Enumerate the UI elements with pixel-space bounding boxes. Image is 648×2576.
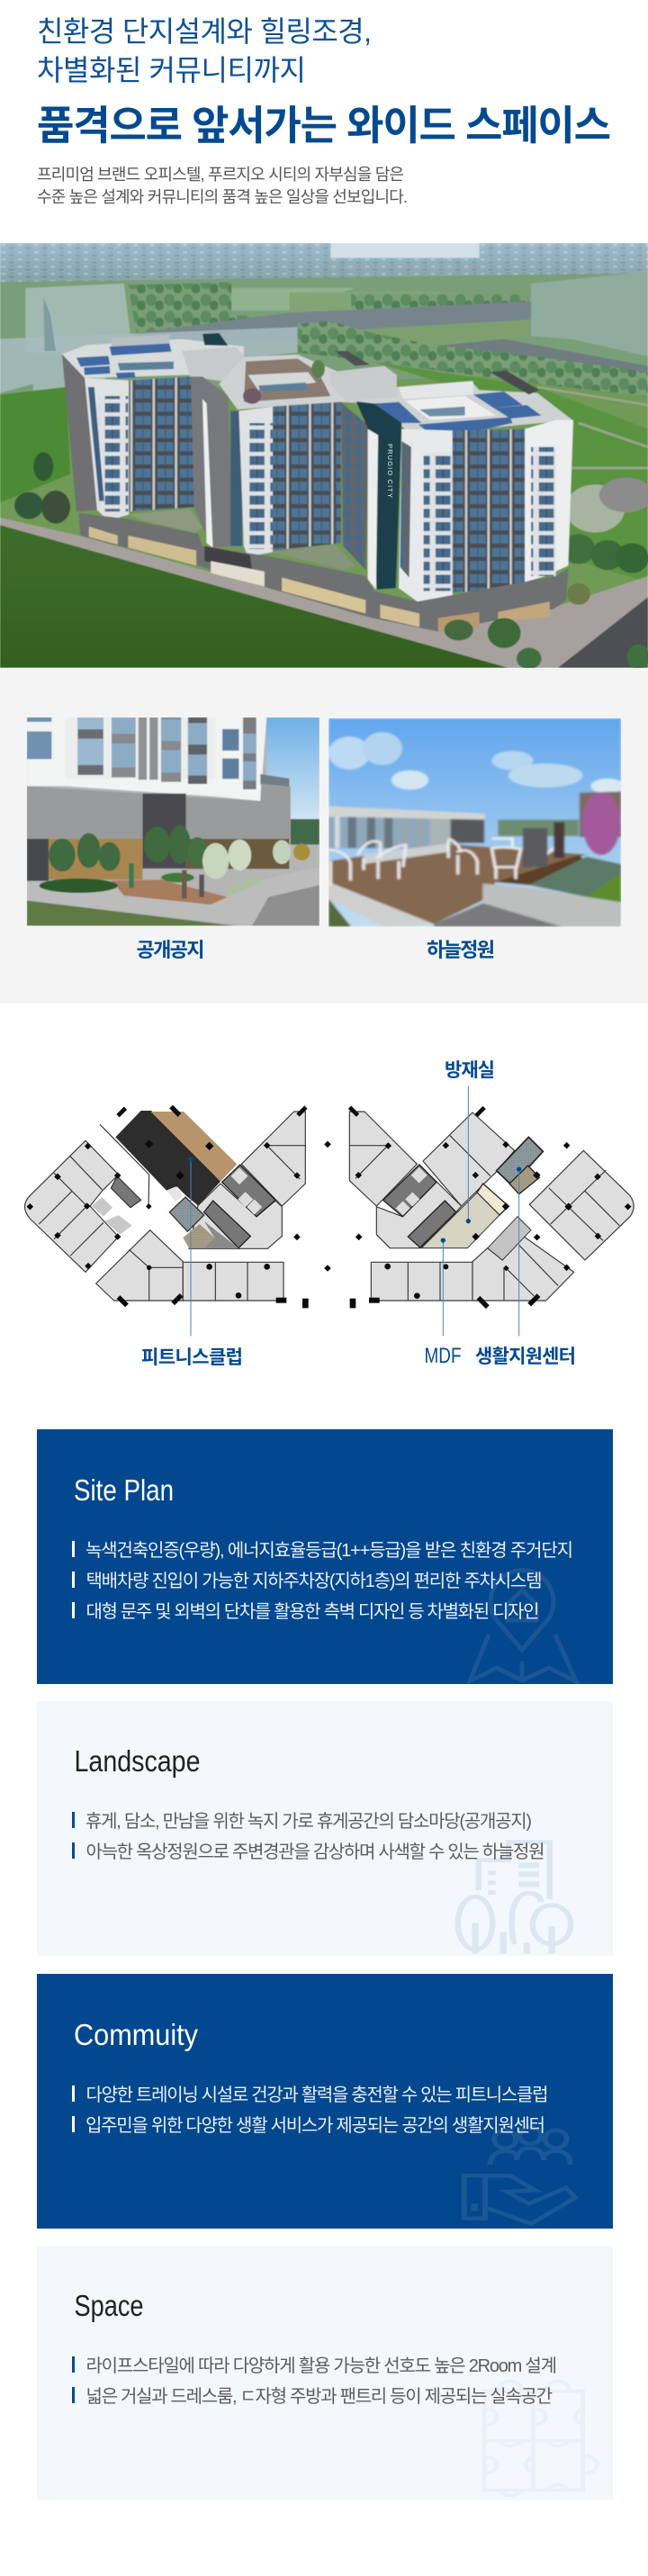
title line 1: 친환경 단지설계와 힐링조경, [37, 15, 372, 48]
panel: Landscape [37, 1701, 613, 1956]
list: Site Plan: 택배차량 진입이 가능한 지하주차장(지하1층)의 편리한 주차시스템 [86, 1571, 542, 1591]
sign text on building: PRUGIO CITY [386, 444, 394, 498]
list: Site Plan: 녹색건축인증(우량), 에너지효율등급(1++등급)을 받은 친환경 주거단지 [86, 1540, 573, 1561]
list: Space: 라이프스타일에 따라 다양하게 활용 가능한 선호도 높은 2Room 설계 [86, 2355, 557, 2376]
list: Site Plan: 대형 문주 및 외벽의 단차를 활용한 측벽 디자인 등 차별화된 디자인 [86, 1601, 540, 1622]
label: disaster control room: 방재실 [445, 1060, 495, 1081]
list: Space [72, 2355, 557, 2407]
title line 2: 차별화된 커뮤니티까지 [37, 54, 306, 86]
label: life support center: 생활지원센터 [475, 1347, 576, 1367]
icon: people in hand [464, 2127, 575, 2224]
icon: puzzle [484, 2382, 597, 2495]
heading: Landscape: Landscape [74, 1744, 200, 1778]
panel: Community [37, 1974, 613, 2229]
heading: Space: Space [74, 2289, 144, 2322]
floor plan: right wing [324, 1086, 634, 1336]
title block [37, 15, 611, 206]
list: Landscape: 휴게, 담소, 만남을 위한 녹지 가로 휴게공간의 담소마당(공개공지) [86, 1811, 532, 1832]
list: Landscape [72, 1811, 545, 1862]
label: MDF: MDF [425, 1344, 461, 1368]
heading: Site Plan: Site Plan [74, 1473, 174, 1507]
list: Landscape: 아늑한 옥상정원으로 주변경관을 감상하며 사색할 수 있는 하늘정원 [86, 1842, 545, 1862]
panel: Space [37, 2246, 613, 2500]
photo: public open space [27, 717, 320, 926]
list: Community [72, 2085, 549, 2136]
list: Site Plan [72, 1540, 573, 1622]
list: Community: 다양한 트레이닝 시설로 건강과 활력을 충전할 수 있는 피트니스클럽 [86, 2085, 549, 2105]
description line 1: 프리미엄 브랜드 오피스텔, 푸르지오 시티의 자부심을 담은 [37, 166, 404, 184]
list: Space: 넓은 거실과 드레스룸, ㄷ자형 주방과 팬트리 등이 제공되는 실속공간 [86, 2386, 553, 2407]
aerial building photo [0, 243, 648, 670]
heading: Commuity: Commuity [74, 2018, 198, 2051]
main heading: 품격으로 앞서가는 와이드 스페이스 [37, 103, 611, 149]
photo: sky garden [328, 718, 624, 927]
caption: sky garden: 하늘정원 [427, 939, 495, 961]
label: fitness club: 피트니스클럽 [141, 1347, 243, 1368]
floor plan: left wing [24, 1105, 309, 1336]
icon: buildings and trees [458, 1842, 571, 1954]
panel: Site Plan [37, 1429, 613, 1684]
icon: map pin [470, 1571, 576, 1681]
list: Community: 입주민을 위한 다양한 생활 서비스가 제공되는 공간의 생활지원센터 [86, 2115, 545, 2136]
description line 2: 수준 높은 설계와 커뮤니티의 품격 높은 일상을 선보입니다. [37, 188, 408, 206]
caption: public open space: 공개공지 [137, 939, 205, 961]
panel: gallery band [0, 668, 648, 1004]
